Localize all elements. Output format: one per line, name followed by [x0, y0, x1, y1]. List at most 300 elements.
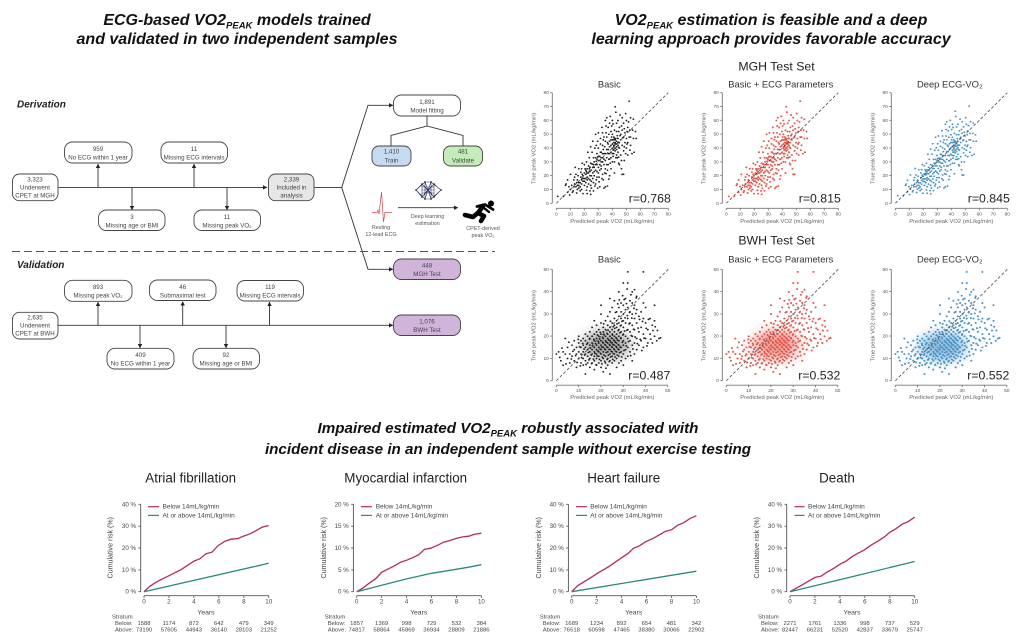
line chart: myocardial infarction: Stratum	[325, 615, 345, 621]
scatter chart: MGH basic + ECG parameters: 80	[836, 211, 841, 217]
line chart: atrial fibrillation: 28103	[236, 628, 253, 634]
scatter chart: BWH basic: Predicted peak VO2 (mL/kg/min)	[570, 395, 654, 401]
title: right panel heading: PEAK	[647, 20, 674, 32]
line chart: myocardial infarction: 10	[478, 599, 485, 606]
line chart: heart failure: 30066	[663, 628, 680, 634]
line chart: death: Stratum	[758, 615, 779, 621]
scatter chart: MGH deep ECG-VO2: 80	[882, 90, 888, 96]
scatter chart: MGH basic + ECG parameters: 60	[808, 211, 813, 217]
box: missing age or BMI: Missing age or BMI	[106, 222, 159, 230]
line chart: death: 737	[885, 621, 895, 627]
scatter chart: MGH deep ECG-VO2: 10	[882, 187, 888, 193]
title: left panel heading: PEAK	[226, 20, 254, 32]
scatter chart: BWH deep ECG-VO2: 0	[885, 378, 888, 384]
line chart: heart failure: 76518	[564, 628, 581, 634]
scatter chart: MGH basic + ECG parameters: 0	[725, 211, 728, 217]
box: missing ECG intervals: Missing ECG intervals	[164, 154, 224, 162]
scatter chart: MGH basic + ECG parameters: 40	[780, 211, 785, 217]
line chart: myocardial infarction: 58864	[373, 628, 391, 634]
line chart: death: 4	[838, 599, 842, 606]
scatter chart: BWH deep ECG-VO2: 0	[894, 388, 897, 394]
box: underwent CPET at MGH: 3,323	[27, 176, 43, 184]
line chart: death: 33679	[882, 628, 898, 634]
line chart: myocardial infarction: 6	[430, 599, 434, 606]
scatter chart: BWH basic + ECG parameters: 50	[713, 267, 719, 273]
line chart: myocardial infarction: Cumulative risk (%)	[320, 517, 328, 578]
scatter chart: MGH basic + ECG parameters: True peak VO2 (mL/kg/min)	[701, 113, 707, 184]
scatter chart: MGH basic + ECG parameters: 70	[822, 211, 827, 217]
line chart: atrial fibrillation: 44943	[186, 628, 203, 634]
line chart: death: 10 %	[768, 567, 782, 574]
box: train: 1,410	[384, 148, 400, 156]
scatter chart: BWH deep ECG-VO2: 20	[937, 388, 943, 394]
scatter chart: BWH deep ECG-VO2: 50	[882, 267, 888, 273]
scatter chart: MGH basic + ECG parameters: r=0.815	[799, 191, 841, 205]
title: left panel heading: ECG-based VO2	[103, 12, 226, 29]
caption: resting 12-lead ECG: Resting	[372, 225, 390, 231]
box: underwent CPET at MGH: Underwent	[20, 184, 50, 192]
scatter chart: BWH basic: 20	[543, 334, 549, 340]
line chart: heart failure: 30 %	[550, 523, 564, 530]
line chart: myocardial infarction: 8	[455, 599, 459, 606]
line chart: myocardial infarction: 2	[380, 599, 384, 606]
box: underwent CPET at BWH: CPET at BWH	[15, 330, 55, 338]
title: bottom section heading	[265, 420, 752, 458]
box: included in analysis: analysis	[280, 192, 303, 200]
line chart: death: Years	[843, 610, 861, 617]
scatter chart: BWH basic	[531, 254, 671, 401]
scatter chart: MGH basic: 60	[543, 118, 549, 124]
line chart: myocardial infarction: Years	[410, 610, 428, 617]
line chart: myocardial infarction: 0 %	[338, 589, 349, 596]
scatter chart: BWH basic: 50	[543, 267, 549, 273]
line chart: atrial fibrillation: 479	[239, 621, 249, 627]
heading: derivation: Derivation	[17, 100, 66, 110]
scatter chart: BWH deep ECG-VO2: 40	[982, 388, 987, 394]
heading: validation: Validation	[17, 260, 64, 271]
line chart: myocardial infarction: At or above 14mL/kg/min	[376, 512, 448, 519]
scatter chart: BWH deep ECG-VO2: 10	[882, 356, 888, 362]
line chart: death	[753, 471, 923, 634]
line chart: heart failure: Below:	[543, 621, 561, 627]
line chart: atrial fibrillation: 20 %	[122, 545, 136, 552]
box: missing age or BMI: 92	[223, 352, 230, 359]
line chart: heart failure	[535, 471, 705, 634]
line chart: heart failure: 6	[645, 599, 649, 606]
box: validate: 481	[458, 148, 469, 156]
box: model fitting	[394, 95, 460, 116]
line chart: myocardial infarction: Myocardial infarction	[344, 471, 467, 486]
line chart: atrial fibrillation: 30 %	[122, 523, 136, 530]
line chart: heart failure: Years	[625, 610, 643, 617]
box: missing peak VO2	[194, 210, 260, 230]
scatter chart: MGH basic: 20	[582, 211, 587, 217]
box: validate	[444, 146, 482, 166]
line chart: atrial fibrillation: Above:	[115, 628, 134, 634]
scatter chart: MGH deep ECG-VO2: Predicted peak VO2 (mL/kg/min)	[909, 219, 993, 225]
line chart: heart failure: Above:	[543, 628, 561, 634]
line chart: heart failure: Heart failure	[587, 471, 660, 486]
box: model fitting: Model fitting	[410, 108, 444, 114]
line chart: heart failure: 342	[691, 621, 701, 627]
line chart: heart failure: 4	[620, 599, 624, 606]
scatter chart: MGH deep ECG-VO2: Deep ECG-VO₂	[917, 78, 983, 89]
scatter chart: BWH basic + ECG parameters: 40	[713, 289, 719, 295]
line chart: heart failure: Stratum	[540, 615, 560, 621]
scatter chart: MGH basic + ECG parameters: 50	[713, 132, 719, 138]
scatter chart: BWH basic: 20	[598, 388, 604, 394]
scatter chart: BWH basic + ECG parameters: Basic + ECG Parameters	[728, 254, 834, 265]
box: no ECG within 1 year	[107, 348, 174, 369]
line chart: atrial fibrillation	[106, 471, 277, 634]
box: missing peak VO2: 893	[93, 284, 104, 291]
scatter chart: BWH basic + ECG parameters: 0	[725, 388, 728, 394]
scatter chart: MGH deep ECG-VO2: 50	[882, 132, 888, 138]
scatter chart: BWH basic: 10	[543, 356, 549, 362]
scatter chart: BWH basic: 30	[621, 388, 626, 394]
heading: BWH test set: BWH Test Set	[738, 234, 815, 248]
box: submaximal test: Submaximal test	[160, 292, 206, 300]
box: included in analysis: 2,339	[284, 176, 300, 184]
box: no ECG within 1 year: No ECG within 1 year	[111, 360, 170, 368]
scatter chart: BWH deep ECG-VO2: 20	[882, 334, 888, 340]
line chart: myocardial infarction: 384	[476, 621, 487, 627]
line chart: atrial fibrillation: 4	[192, 599, 196, 606]
scatter chart: BWH basic: Basic	[598, 254, 621, 265]
line chart: death: 6	[863, 599, 867, 606]
scatter chart: MGH basic + ECG parameters	[701, 78, 841, 225]
box: underwent CPET at BWH: 2,635	[27, 314, 43, 322]
scatter chart: BWH basic + ECG parameters: r=0.532	[798, 369, 840, 383]
box: BWH test: BWH Test	[413, 327, 441, 334]
scatter chart: MGH basic: 0	[555, 211, 558, 217]
box: missing ECG intervals	[237, 280, 304, 301]
line chart: heart failure: 10	[693, 599, 700, 606]
line chart: myocardial infarction: Below:	[328, 621, 346, 627]
title: bottom section heading: robustly associated with	[517, 420, 698, 437]
scatter chart: MGH deep ECG-VO2: 40	[949, 211, 954, 217]
caption: CPET-derived peak VO2: peak VO₂	[471, 233, 495, 239]
scatter chart: BWH deep ECG-VO2: 30	[882, 311, 888, 317]
line chart: heart failure: 8	[670, 599, 674, 606]
line chart: myocardial infarction	[320, 471, 490, 634]
title: right panel heading: learning approach provides favorable accuracy	[591, 31, 952, 48]
scatter chart: MGH deep ECG-VO2: 0	[885, 201, 888, 207]
line chart: death: Cumulative risk (%)	[753, 517, 761, 578]
line chart: myocardial infarction: 28809	[448, 628, 465, 634]
line chart: atrial fibrillation: 40 %	[122, 501, 136, 508]
line chart: myocardial infarction: 1857	[350, 621, 363, 627]
line chart: atrial fibrillation: 349	[264, 621, 274, 627]
line chart: death: 40 %	[768, 501, 782, 508]
scatter chart: BWH basic: r=0.487	[628, 369, 670, 383]
scatter chart: MGH basic + ECG parameters: 10	[713, 187, 719, 193]
line chart: myocardial infarction: 20 %	[335, 501, 349, 508]
scatter chart: BWH deep ECG-VO2: Predicted peak VO2 (mL/kg/min)	[909, 395, 993, 401]
line chart: atrial fibrillation: 57605	[161, 628, 178, 634]
scatter chart: BWH basic: 40	[643, 388, 648, 394]
line chart: atrial fibrillation: Below 14mL/kg/min	[162, 504, 220, 511]
box: missing ECG intervals: Missing ECG intervals	[240, 292, 300, 300]
scatter chart: MGH basic: 40	[543, 146, 549, 152]
box: BWH test	[394, 315, 460, 336]
line chart: heart failure: 1234	[590, 621, 604, 627]
scatter chart: MGH deep ECG-VO2: 10	[907, 211, 912, 217]
scatter chart: MGH basic: 40	[610, 211, 615, 217]
scatter chart: MGH basic: Predicted peak VO2 (mL/kg/min)	[570, 219, 654, 225]
line chart: heart failure: 2	[595, 599, 599, 606]
scatter chart: MGH deep ECG-VO2: 20	[882, 173, 888, 179]
scatter chart: MGH basic	[531, 78, 671, 225]
scatter chart: MGH deep ECG-VO2: True peak VO2 (mL/kg/min)	[870, 113, 876, 184]
scatter chart: BWH deep ECG-VO2: True peak VO2 (mL/kg/min)	[870, 290, 876, 361]
scatter chart: MGH basic: Basic	[598, 78, 621, 89]
box: BWH test: 1,076	[419, 318, 435, 326]
caption: deep learning estimation: Deep learning	[411, 214, 444, 220]
line chart: myocardial infarction: 21886	[473, 628, 490, 634]
line chart: myocardial infarction: 5 %	[338, 567, 349, 574]
scatter chart: MGH basic: 20	[543, 173, 549, 179]
line chart: death: 529	[910, 621, 920, 627]
scatter chart: MGH deep ECG-VO2	[870, 78, 1010, 225]
scatter chart: BWH basic: 0	[555, 388, 558, 394]
line chart: atrial fibrillation: Stratum	[112, 615, 133, 621]
caption: resting 12-lead ECG: 12-lead ECG	[365, 232, 397, 238]
scatter chart: MGH deep ECG-VO2: 30	[935, 211, 940, 217]
scatter chart: MGH basic: 80	[543, 90, 549, 96]
box: missing age or BMI	[98, 210, 165, 230]
scatter chart: MGH basic: 80	[666, 211, 671, 217]
box: MGH test	[394, 259, 460, 280]
box: missing peak VO2: 11	[224, 214, 231, 221]
line chart: death: Below:	[761, 621, 779, 627]
caption: CPET-derived peak VO2: CPET-derived	[466, 226, 500, 232]
scatter chart: MGH basic + ECG parameters: 60	[713, 118, 719, 124]
scatter chart: MGH basic + ECG parameters: 0	[716, 201, 719, 207]
title: left panel heading: and validated in two independent samples	[77, 31, 398, 48]
line chart: atrial fibrillation: 10	[265, 599, 273, 606]
scatter chart: BWH basic + ECG parameters: 30	[713, 311, 719, 317]
caption: deep learning estimation	[411, 214, 444, 227]
scatter chart: BWH basic + ECG parameters: True peak VO2 (mL/kg/min)	[701, 290, 707, 361]
line chart: heart failure: 1689	[565, 621, 578, 627]
line chart: atrial fibrillation: At or above 14mL/kg/min	[162, 512, 235, 519]
line chart: atrial fibrillation: 642	[214, 621, 224, 627]
scatter chart: BWH basic: 50	[665, 388, 671, 394]
line chart: atrial fibrillation: 0	[142, 599, 146, 606]
scatter chart: BWH basic + ECG parameters: Predicted peak VO2 (mL/kg/min)	[740, 395, 824, 401]
line chart: heart failure: 0 %	[553, 589, 564, 596]
scatter chart: BWH basic: 0	[546, 378, 549, 384]
heading: MGH test set: MGH Test Set	[738, 60, 815, 74]
scatter chart: MGH basic: 0	[546, 201, 549, 207]
scatter chart: MGH basic + ECG parameters: 80	[713, 90, 719, 96]
scatter chart: MGH basic + ECG parameters: 20	[713, 173, 719, 179]
title: right panel heading: estimation is feasible and a deep	[673, 12, 928, 29]
line chart: heart failure: At or above 14mL/kg/min	[590, 512, 663, 519]
scatter chart: MGH deep ECG-VO2: 60	[882, 118, 888, 124]
line chart: atrial fibrillation: 2	[167, 599, 171, 606]
box: MGH test: 448	[422, 262, 433, 270]
line chart: myocardial infarction: 74817	[349, 628, 365, 634]
scatter chart: MGH basic: 70	[652, 211, 657, 217]
box: underwent CPET at MGH: CPET at MGH	[15, 192, 55, 200]
scatter chart: BWH basic + ECG parameters: 50	[835, 388, 841, 394]
scatter chart: MGH basic: 10	[568, 211, 573, 217]
line chart: death: 998	[860, 621, 870, 627]
scatter chart: MGH deep ECG-VO2: r=0.845	[968, 191, 1010, 205]
line chart: myocardial infarction: 998	[402, 621, 412, 627]
line chart: death: 1761	[808, 621, 821, 627]
scatter chart: MGH deep ECG-VO2: 60	[977, 211, 982, 217]
line chart: atrial fibrillation: 1588	[137, 621, 151, 627]
scatter chart: MGH deep ECG-VO2: 40	[882, 146, 888, 152]
scatter chart: BWH deep ECG-VO2: 40	[882, 289, 888, 295]
scatter chart: MGH basic + ECG parameters: Predicted peak VO2 (mL/kg/min)	[740, 219, 824, 225]
line chart: atrial fibrillation: 10 %	[122, 567, 136, 574]
scatter chart: MGH deep ECG-VO2: 30	[882, 159, 888, 165]
line chart: myocardial infarction: 532	[452, 621, 461, 627]
scatter chart: MGH deep ECG-VO2: 20	[921, 211, 926, 217]
scatter chart: MGH basic: 60	[638, 211, 643, 217]
scatter chart: MGH basic + ECG parameters: 50	[794, 211, 799, 217]
line chart: heart failure: 481	[667, 621, 676, 627]
scatter chart: BWH basic + ECG parameters: 20	[713, 334, 719, 340]
line chart: death: 0 %	[771, 589, 782, 596]
box: validate: Validate	[452, 158, 475, 164]
scatter chart: BWH basic + ECG parameters: 0	[716, 378, 719, 384]
scatter chart: BWH deep ECG-VO2: 10	[915, 388, 921, 394]
scatter chart: BWH basic: True peak VO2 (mL/kg/min)	[531, 290, 537, 361]
line chart: atrial fibrillation: 21252	[261, 628, 277, 634]
line chart: death: Death	[819, 471, 855, 486]
scatter chart: MGH deep ECG-VO2: 50	[963, 211, 968, 217]
line chart: myocardial infarction: 10 %	[335, 545, 349, 552]
title: bottom section heading: PEAK	[491, 428, 518, 440]
box: underwent CPET at BWH	[12, 312, 58, 339]
line chart: heart failure: 0	[570, 599, 574, 606]
line chart: death: At or above 14mL/kg/min	[808, 512, 881, 519]
scatter chart: BWH deep ECG-VO2: r=0.552	[967, 369, 1009, 383]
scatter chart: MGH basic: 70	[543, 104, 549, 110]
title: bottom section heading: Impaired estimated VO2	[318, 420, 491, 437]
scatter chart: BWH basic + ECG parameters: 10	[713, 356, 719, 362]
scatter chart: MGH basic + ECG parameters: 40	[713, 146, 719, 152]
title: right panel heading	[591, 12, 952, 48]
scatter chart: MGH basic: r=0.768	[629, 191, 671, 205]
line chart: heart failure: 10 %	[550, 567, 564, 574]
scatter chart: MGH deep ECG-VO2: 0	[894, 211, 897, 217]
line chart: heart failure: 40 %	[550, 501, 564, 508]
line chart: death: 8	[888, 599, 892, 606]
box: included in analysis	[268, 174, 314, 201]
box: missing peak VO2	[64, 280, 132, 301]
line chart: death: 66231	[807, 628, 823, 634]
arrow: deep learning estimation	[398, 207, 458, 209]
box: missing age or BMI	[193, 348, 260, 369]
line chart: heart failure: Below 14mL/kg/min	[590, 504, 647, 511]
line chart: death: 0	[788, 599, 792, 606]
line chart: heart failure: 892	[617, 621, 627, 627]
line chart: myocardial infarction: 15 %	[335, 523, 349, 530]
scatter chart: MGH basic: 10	[543, 187, 549, 193]
box: underwent CPET at MGH	[12, 174, 58, 201]
panel: validation flow diagram	[12, 260, 393, 369]
line chart: myocardial infarction: Above:	[328, 628, 346, 634]
connector lines: derivation	[58, 164, 267, 210]
line chart: myocardial infarction: 729	[427, 621, 436, 627]
icon: neural network	[415, 181, 442, 200]
line chart: heart failure: 22902	[688, 628, 705, 634]
section divider	[12, 250, 495, 252]
caption: deep learning estimation: estimation	[415, 221, 440, 227]
line chart: myocardial infarction: Below 14mL/kg/min	[376, 504, 433, 511]
box: missing ECG intervals: 11	[191, 146, 198, 153]
box: included in analysis: Included in	[277, 184, 307, 192]
line chart: atrial fibrillation: Atrial fibrillation	[145, 471, 236, 486]
icon: ECG trace	[372, 192, 392, 222]
box: no ECG within 1 year: No ECG within 1 year	[68, 154, 128, 162]
line chart: death: Above:	[761, 628, 780, 634]
scatter chart: MGH deep ECG-VO2: 80	[1005, 211, 1010, 217]
scatter chart: MGH basic: 50	[543, 132, 549, 138]
line chart: death: 20 %	[768, 545, 782, 552]
scatter chart: MGH basic: True peak VO2 (mL/kg/min)	[531, 113, 537, 184]
box: train	[372, 146, 411, 166]
box: submaximal test	[150, 280, 216, 300]
line chart: heart failure: Cumulative risk (%)	[535, 517, 543, 578]
line chart: heart failure: 654	[642, 621, 652, 627]
line chart: death: 1336	[833, 621, 847, 627]
line chart: death: 2	[813, 599, 817, 606]
line chart: death: 10	[911, 599, 919, 606]
line chart: myocardial infarction: 4	[405, 599, 409, 606]
scatter chart: BWH deep ECG-VO2: 50	[1004, 388, 1010, 394]
scatter chart: BWH deep ECG-VO2: Deep ECG-VO₂	[917, 254, 983, 265]
scatter chart: BWH basic + ECG parameters: 30	[791, 388, 796, 394]
scatter chart: BWH basic: 30	[543, 311, 549, 317]
box: no ECG within 1 year: 409	[135, 352, 146, 359]
scatter chart: MGH basic + ECG parameters: 10	[738, 211, 743, 217]
scatter chart: MGH basic + ECG parameters: 20	[752, 211, 757, 217]
line chart: atrial fibrillation: 1174	[163, 621, 176, 627]
line chart: death: 25747	[907, 628, 923, 634]
scatter chart: BWH basic: 40	[543, 289, 549, 295]
icon: runner	[465, 200, 494, 221]
line chart: death: 30 %	[768, 523, 782, 530]
scatter chart: MGH basic: 30	[543, 159, 549, 165]
connector lines: validation	[58, 302, 393, 348]
box: missing peak VO2: Missing peak VO₂	[202, 222, 252, 230]
line chart: death: 2271	[783, 621, 797, 627]
line chart: atrial fibrillation: 36140	[211, 628, 228, 634]
scatter chart: MGH basic + ECG parameters: Basic + ECG Parameters	[728, 78, 834, 89]
line chart: myocardial infarction: 36934	[423, 628, 440, 634]
caption: resting 12-lead ECG	[365, 225, 397, 238]
line chart: heart failure: 60598	[588, 628, 606, 634]
box: missing age or BMI: Missing age or BMI	[200, 360, 253, 368]
box: model fitting: 1,891	[419, 99, 435, 106]
box: missing peak VO2: Missing peak VO₂	[73, 292, 123, 300]
line chart: atrial fibrillation: 872	[189, 621, 199, 627]
scatter chart: BWH deep ECG-VO2: 30	[960, 388, 965, 394]
line chart: atrial fibrillation: 73190	[136, 628, 153, 634]
line chart: atrial fibrillation: Cumulative risk (%)	[106, 517, 114, 578]
scatter chart: BWH basic: 10	[576, 388, 582, 394]
box: MGH test: MGH Test	[413, 271, 441, 278]
title: bottom section heading: incident disease in an independent sample without exercise testing	[265, 441, 752, 458]
connector: branching to model fitting and MGH test	[314, 105, 463, 269]
